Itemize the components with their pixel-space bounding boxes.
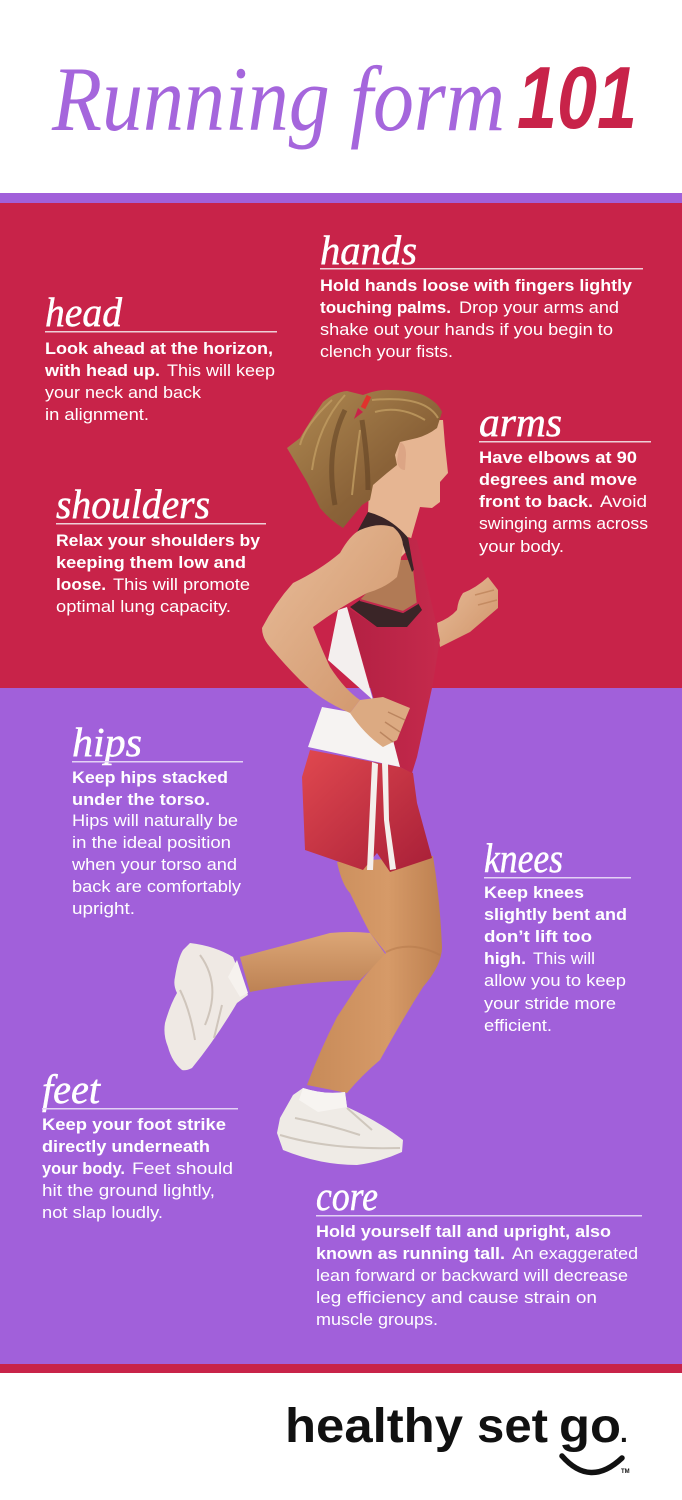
panel: knees: Keep knees — [484, 883, 584, 902]
heading: feet: feet — [42, 1066, 102, 1112]
tank top panel — [347, 537, 440, 773]
thigh and front leg — [307, 856, 442, 1093]
panel: hips: Hips will naturally be — [72, 811, 238, 830]
panel: hands: clench your fists. — [320, 342, 453, 361]
back lower leg — [240, 932, 386, 992]
panel: feet: directly underneath — [42, 1137, 210, 1156]
panel: arms: front to back. — [479, 492, 593, 511]
panel: head: in alignment. — [45, 405, 149, 424]
title: 101 — [517, 48, 637, 147]
logo: healthy set go: healthy — [285, 1400, 463, 1453]
panel: hands — [320, 227, 643, 361]
panel: arms: degrees and move — [479, 470, 637, 489]
heading: core: core — [316, 1173, 378, 1219]
panel: feet: not slap loudly. — [42, 1203, 163, 1222]
panel: feet — [42, 1066, 238, 1222]
panel: arms: Have elbows at 90 — [479, 448, 637, 467]
panel: shoulders: Relax your shoulders by — [56, 531, 261, 550]
panel: core: Hold yourself tall and upright, also — [316, 1222, 611, 1241]
heading: arms: arms — [479, 399, 562, 445]
panel: hands: Drop your arms and — [459, 298, 619, 317]
title: Running form — [51, 48, 505, 150]
arm — [262, 525, 403, 713]
back shoe — [164, 943, 248, 1070]
panel: arms: your body. — [479, 537, 564, 556]
panel: knees — [484, 835, 631, 1035]
panel: feet: Feet should — [132, 1159, 233, 1178]
panel: feet: Keep your foot strike — [42, 1115, 226, 1134]
panel: knees: This will — [533, 949, 595, 968]
runner photo illustration — [164, 390, 498, 1165]
panel: head — [44, 289, 277, 424]
panel: shoulders — [56, 481, 266, 616]
heading: hands: hands — [320, 227, 417, 273]
shorts — [302, 750, 432, 872]
dark top strap — [357, 512, 418, 572]
panel: head: your neck and back — [45, 383, 202, 402]
front shoe — [277, 1088, 403, 1165]
hair tie — [363, 396, 369, 408]
panel: hips: Keep hips stacked — [72, 768, 228, 787]
panel: arms: swinging arms across — [479, 514, 648, 533]
panel: arms — [479, 399, 651, 556]
back of torso skin — [360, 560, 417, 612]
panel: hips — [71, 719, 243, 918]
heading: hips: hips — [72, 719, 142, 765]
panel: hands: touching palms. — [320, 298, 451, 317]
logo: healthy set go: . — [620, 1417, 628, 1448]
white panels — [328, 607, 373, 700]
panel: hands: shake out your hands if you begin to — [320, 320, 613, 339]
panel: core: An exaggerated — [512, 1244, 638, 1263]
panel: hips: back are comfortably — [72, 877, 242, 896]
panel: core: muscle groups. — [316, 1310, 438, 1329]
panel: hips: under the torso. — [72, 790, 210, 809]
logo: healthy set go — [285, 1400, 630, 1475]
panel: knees: allow you to keep — [484, 971, 626, 990]
panel: core: known as running tall. — [316, 1244, 505, 1263]
heading: head: head — [45, 289, 122, 335]
logo: healthy set go: go — [559, 1400, 621, 1453]
heading: shoulders: shoulders — [56, 481, 210, 527]
panel: shoulders: This will promote — [113, 575, 250, 594]
logo: healthy set go: set — [477, 1400, 548, 1453]
logo: healthy set go: TM — [621, 1469, 630, 1475]
panel: knees: don’t lift too — [484, 927, 592, 946]
panel: core: leg efficiency and cause strain on — [316, 1288, 597, 1307]
panel: head: with head up. — [44, 361, 160, 380]
panel: shoulders: keeping them low and — [56, 553, 246, 572]
panel: arms: Avoid — [600, 492, 647, 511]
front arm — [437, 577, 498, 647]
panel: head: This will keep — [167, 361, 275, 380]
heading: knees: knees — [484, 835, 563, 881]
panel: knees: slightly bent and — [484, 905, 627, 924]
ear — [397, 442, 406, 470]
hand on hip — [350, 697, 410, 747]
panel: knees: efficient. — [484, 1016, 552, 1035]
panel: feet: your body. — [42, 1159, 125, 1178]
panel: hips: when your torso and — [71, 855, 237, 874]
panel: knees: high. — [484, 949, 526, 968]
panel: hips: in the ideal position — [72, 833, 231, 852]
panel: core: lean forward or backward will decrease — [316, 1266, 628, 1285]
panel: hips: upright. — [72, 899, 135, 918]
panel: feet: hit the ground lightly, — [42, 1181, 215, 1200]
panel: hands: Hold hands loose with fingers lightly — [320, 276, 633, 295]
panel: head: Look ahead at the horizon, — [45, 339, 273, 358]
panel: shoulders: optimal lung capacity. — [56, 597, 231, 616]
panel: knees: your stride more — [484, 994, 616, 1013]
panel: core — [316, 1173, 642, 1329]
neck and face — [368, 420, 448, 560]
hair and ponytail — [287, 390, 442, 528]
panel: shoulders: loose. — [56, 575, 106, 594]
